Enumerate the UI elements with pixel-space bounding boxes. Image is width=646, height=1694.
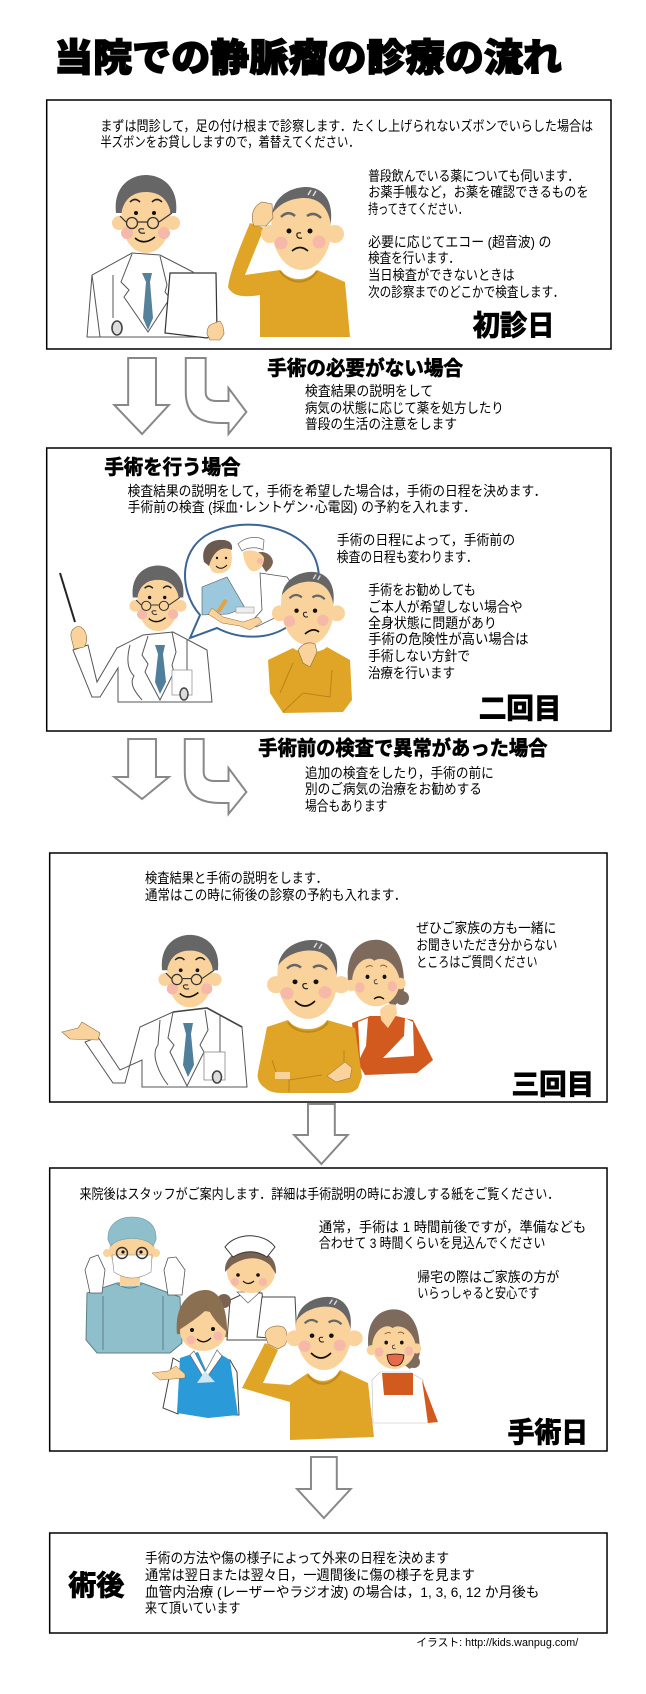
side note: no surgery policy: ご本人が希望しない場合や: [368, 599, 523, 615]
side note: going home: 帰宅の際はご家族の方が: [417, 1269, 559, 1285]
text: follow-up: [145, 1550, 539, 1616]
side note: going home: いらっしゃると安心です: [417, 1285, 539, 1301]
text: no surgery needed: 普段の生活の注意をします: [305, 416, 457, 432]
label: third visit: 三回目: [512, 1069, 594, 1100]
explanation text: [368, 168, 589, 300]
panel: third visit: [50, 853, 607, 1102]
arrow: down: [114, 358, 169, 434]
text: follow-up: 血管内治療 (レーザーやラジオ波) の場合は，1, 3, 6, 12 か月後も: [145, 1584, 539, 1600]
side note: no surgery policy: 手術の危険性が高い場合は: [368, 631, 529, 647]
side note: no surgery policy: 手術しない方針で: [368, 648, 470, 664]
panel: surgery day: [50, 1168, 607, 1451]
side note: no surgery policy: 全身状態に問題があり: [368, 615, 497, 631]
intro text: [145, 870, 406, 903]
side note: duration: 通常，手術は 1 時間前後ですが，準備なども: [319, 1219, 586, 1235]
speech bubble with blood test scene: [185, 525, 319, 638]
explanation text: 普段飲んでいる薬についても伺います．: [368, 168, 579, 184]
explanation text: 検査を行います．: [368, 250, 460, 266]
side note: duration: 合わせて 3 時間くらいを見込んでください: [319, 1235, 545, 1251]
side note: no surgery policy: 治療を行います: [368, 665, 455, 681]
text: no surgery needed: [305, 383, 504, 432]
side note: no surgery policy: 手術をお勧めしても: [368, 582, 476, 598]
heading: surgery case: 手術を行う場合: [104, 455, 241, 479]
heading: abnormal pre-op result: 手術前の検査で異常があった場合: [258, 736, 547, 760]
illustration: doctor with pointer: [60, 566, 212, 702]
label: surgery day: 手術日: [508, 1417, 588, 1448]
arrow: down: [114, 739, 169, 799]
illustration: patient scratching head: [228, 187, 350, 337]
intro text: 通常はこの時に術後の診察の予約も入れます．: [145, 887, 406, 903]
illustration: patient raising fist: [242, 1297, 374, 1440]
label: first visit: 初診日: [473, 310, 554, 341]
intro text: [100, 118, 593, 150]
label: second visit: 二回目: [479, 693, 561, 724]
title: 当院での静脈瘤の診療の流れ: [54, 38, 562, 80]
text: no surgery needed: 検査結果の説明をして: [305, 383, 433, 399]
explanation text: 持ってきてください．: [368, 201, 468, 217]
panel: after surgery: [50, 1533, 607, 1633]
panel: second visit: [47, 448, 611, 731]
explanation text: 次の診察までのどこかで検査します．: [368, 284, 564, 300]
label: after surgery: 術後: [69, 1570, 124, 1601]
explanation text: 当日検査ができないときは: [368, 267, 515, 283]
side note: going home: [417, 1269, 559, 1301]
side note: family: お聞きいただき分からない: [416, 937, 557, 953]
arrow: bend right: [185, 739, 246, 814]
text: follow-up: 来て頂いています: [145, 1600, 240, 1616]
illustration: patient arms crossed: [258, 940, 362, 1093]
side note: family: ところはご質問ください: [416, 954, 537, 970]
panel: first visit: [47, 100, 611, 349]
illustration: wife smiling: [367, 1309, 438, 1423]
side note: family: ぜひご家族の方も一緒に: [416, 920, 556, 936]
side note: schedule: 検査の日程も変わります．: [337, 549, 478, 565]
text: no surgery needed: 病気の状態に応じて薬を処方したり: [305, 400, 504, 416]
illustration: patient thinking: [268, 572, 352, 713]
illustration: doctor with paper: [87, 175, 224, 340]
intro text: 検査結果の説明をして，手術を希望した場合は，手術の日程を決めます．: [128, 483, 546, 499]
explanation text: 必要に応じてエコー (超音波) の: [368, 234, 551, 250]
illustration: nurse: [225, 1236, 297, 1340]
text: abnormal pre-op result: 場合もあります: [305, 798, 387, 814]
intro text: [128, 483, 546, 515]
illustration: surgeon: [85, 1217, 185, 1353]
text: abnormal pre-op result: 追加の検査をしたり，手術の前に: [305, 765, 494, 781]
arrow: down: [294, 1104, 348, 1164]
side note: schedule: 手術の日程によって，手術前の: [337, 532, 515, 548]
text: follow-up: 通常は翌日または翌々日，一週間後に傷の様子を見ます: [145, 1567, 475, 1583]
arrow: bend right: [186, 358, 246, 434]
heading: no surgery needed: 手術の必要がない場合: [267, 356, 463, 380]
intro text: 手術前の検査 (採血･レントゲン･心電図) の予約を入れます．: [128, 499, 476, 515]
illustration: doctor presenting: [62, 935, 247, 1087]
text: follow-up: 手術の方法や傷の様子によって外来の日程を決めます: [145, 1550, 449, 1566]
illustration: wife: [346, 940, 433, 1075]
side note: family: [416, 920, 557, 970]
text: abnormal pre-op result: [305, 765, 494, 814]
illustration credit: イラスト: http://kids.wanpug.com/: [416, 1637, 579, 1649]
intro text: 半ズボンをお貸ししますので，着替えてください．: [100, 134, 360, 150]
illustration: receptionist: [152, 1290, 239, 1418]
text: abnormal pre-op result: 別のご病気の治療をお勧めする: [305, 781, 482, 797]
side note: duration: [319, 1219, 586, 1251]
side note: schedule: [337, 532, 515, 565]
explanation text: お薬手帳など，お薬を確認できるものを: [368, 184, 589, 200]
side note: no surgery policy: [368, 582, 529, 681]
intro text: 来院後はスタッフがご案内します．詳細は手術説明の時にお渡しする紙をご覧ください．: [79, 1186, 559, 1202]
arrow: down: [297, 1457, 351, 1518]
intro text: 検査結果と手術の説明をします．: [145, 870, 328, 886]
